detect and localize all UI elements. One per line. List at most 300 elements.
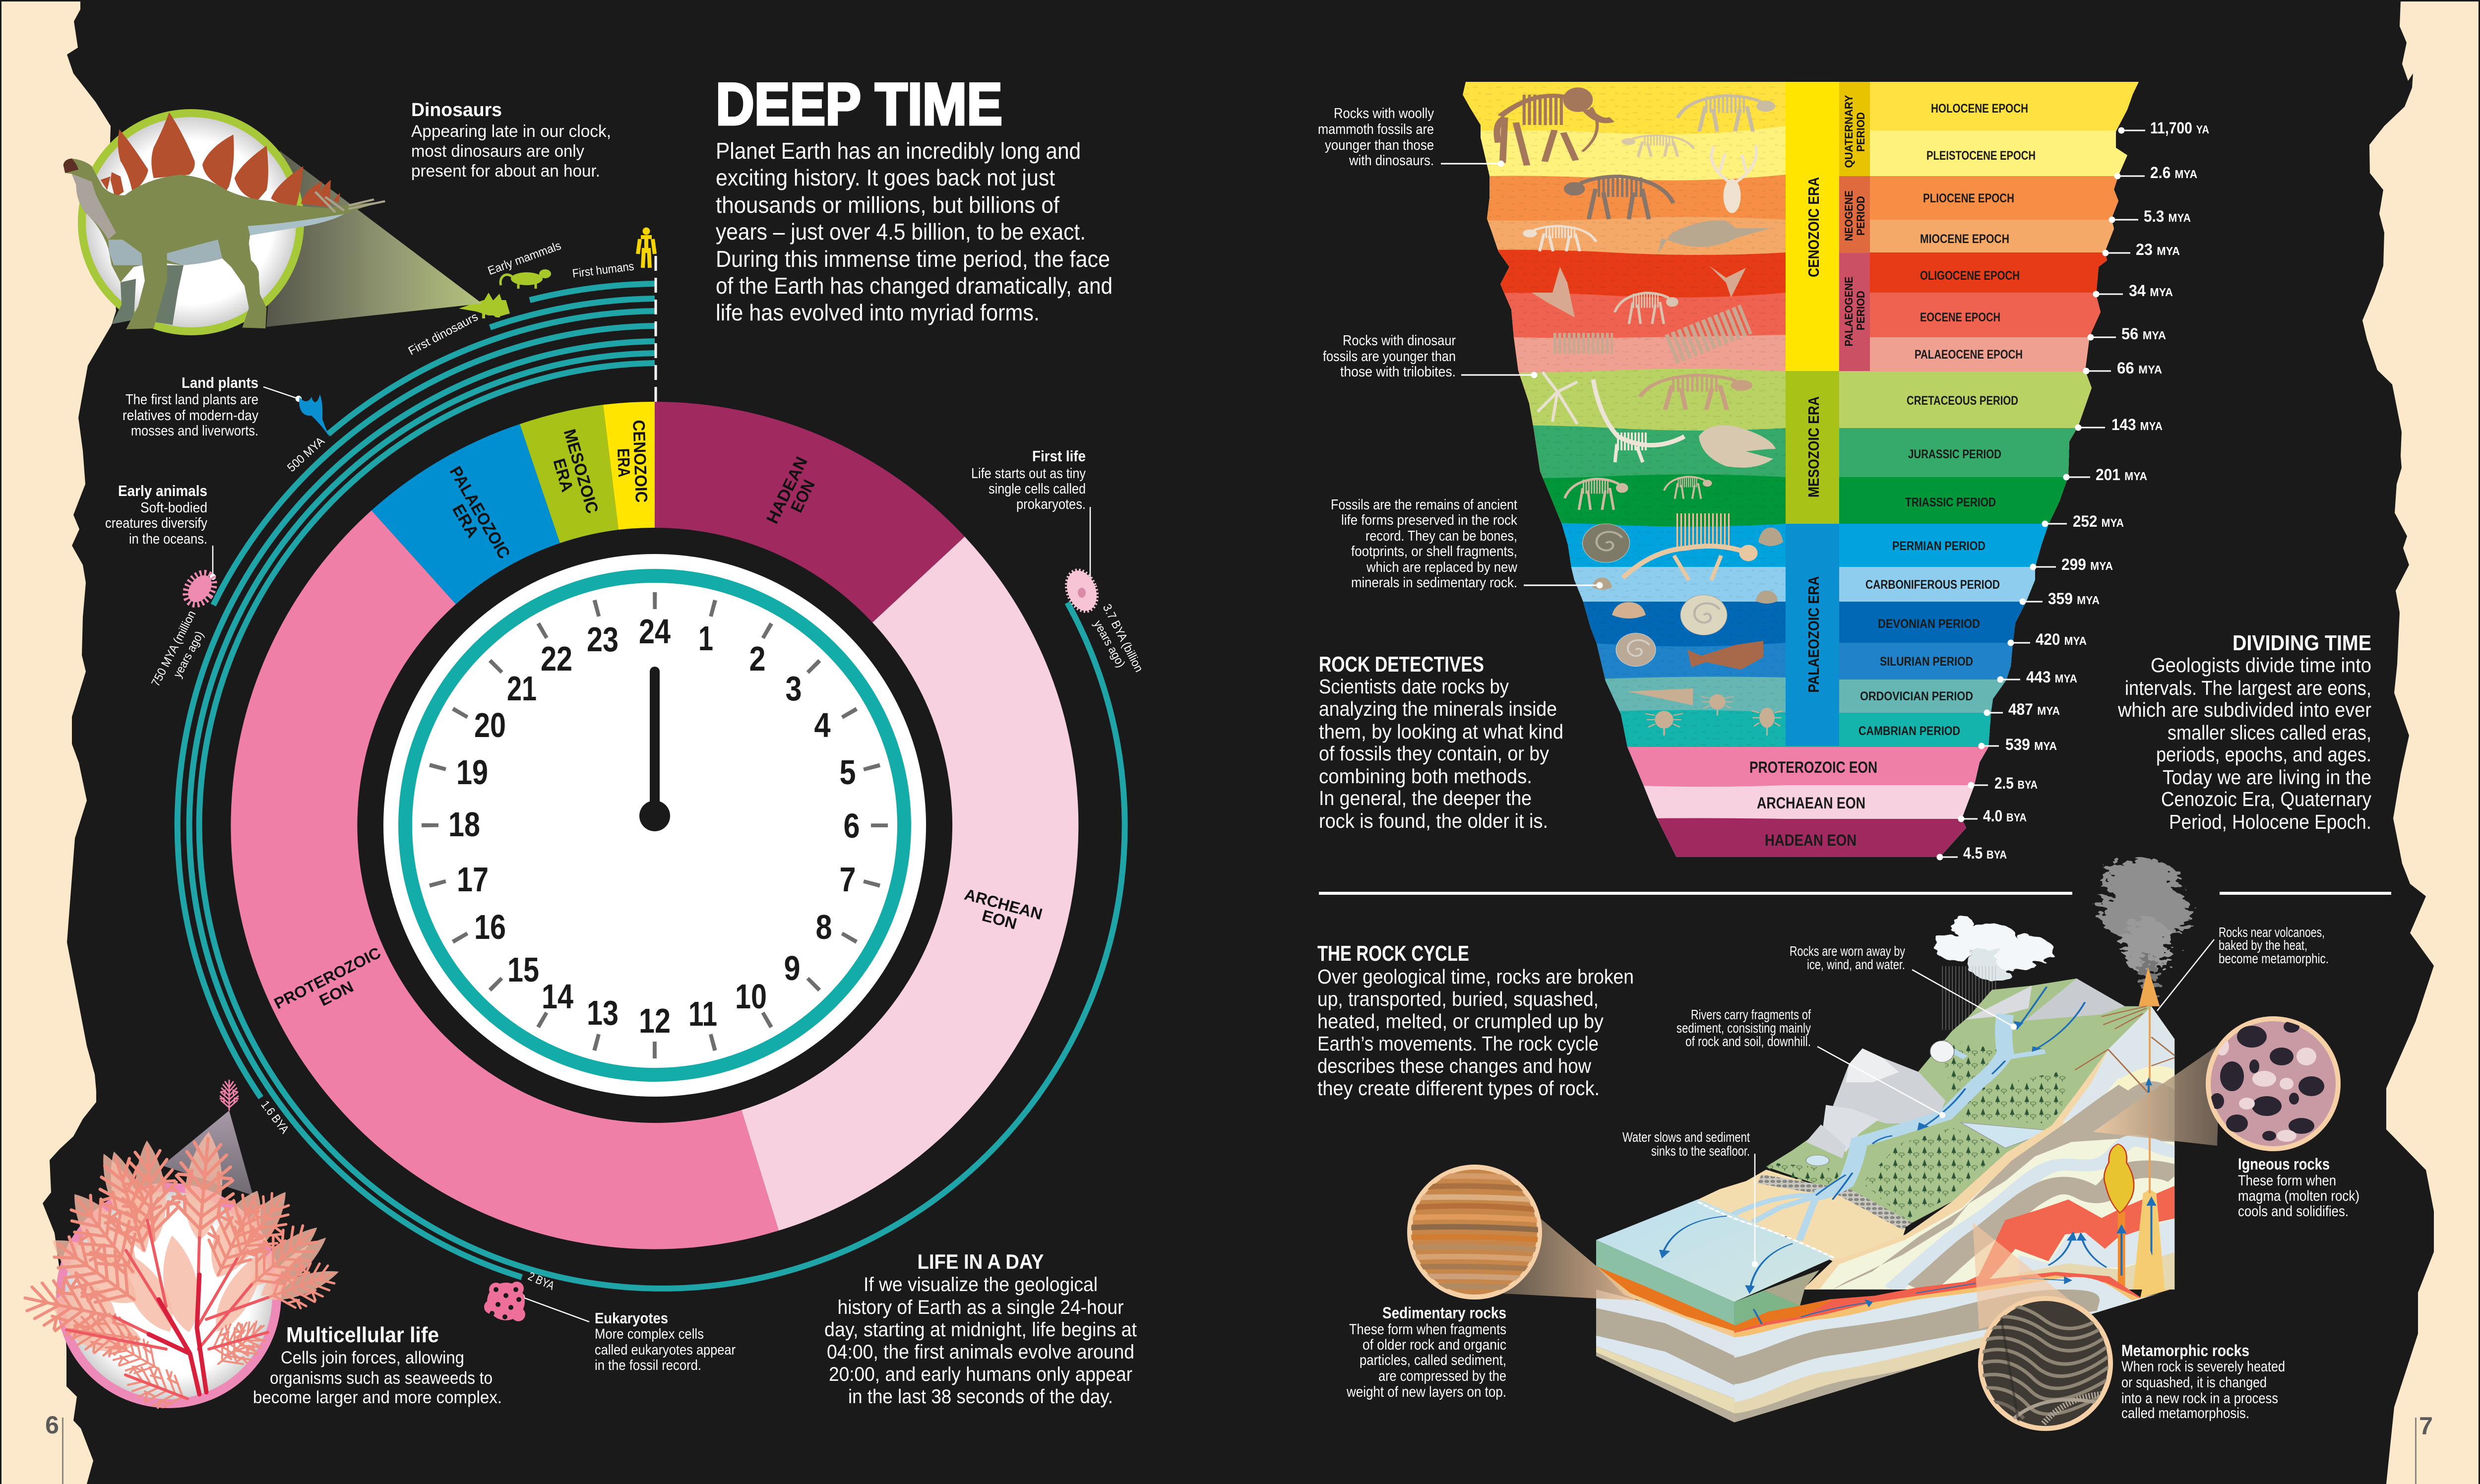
label: igneous rocks: cools and solidifies. [2238,1203,2349,1220]
date labels: 420 MYA [2036,630,2087,648]
date labels: 5.3 MYA [2144,207,2191,225]
label: sedimentary rocks: weight of new layers on top. [1346,1384,1506,1400]
label: Archean Eon: ARCHEAN [963,885,1044,923]
note leader lines [1441,161,1602,588]
text: life in a day: day, starting at midnight, life begins at [824,1319,1137,1341]
callout: eukaryotes text: called eukaryotes appear [595,1342,736,1358]
label: Mesozoic Era: ERA [549,456,577,494]
epoch and period labels: TRIASSIC PERIOD [1905,495,1996,509]
icon: small stegosaurus [459,293,510,318]
note: rivers carry fragments: Rivers carry fragments of [1691,1007,1811,1022]
text: rock detectives [1319,652,1563,832]
rain [1942,921,1998,1075]
vertical era labels: CENOZOIC ERA [1805,177,1822,277]
note: rocks are worn away: Rocks are worn away by [1790,943,1905,959]
date labels: 66 MYA [2117,359,2162,377]
callout: land plants text: Land plants [182,374,258,391]
date labels: 4.0 BYA [1983,807,2027,825]
note: fossils definition: record. They can be bones, [1365,528,1517,544]
note: woolly mammoth rocks: with dinosaurs. [1349,153,1434,169]
callout: multicellular life text [253,1323,502,1407]
river and delta [1816,1014,2005,1195]
fossil: pterodactyl skeleton [1538,372,1577,424]
note: dinosaur rocks [1323,333,1456,380]
hour numerals: 7 [839,860,856,899]
text: the rock cycle: up, transported, buried, squashed, [1317,988,1599,1010]
date labels: 252 MYA [2073,512,2124,530]
hour numerals: 24 [639,612,671,651]
beach [1698,1170,1906,1261]
hour numerals: 12 [639,1001,671,1040]
lakes [1806,1041,2052,1166]
date labels: 143 MYA [2111,416,2163,433]
text: dividing time: Cenozoic Era, Quaternary [2161,788,2371,810]
epoch and period labels: HADEAN EON [1765,831,1857,849]
callout: first life text [971,447,1086,512]
callout: early animals text: Soft-bodied [140,500,207,516]
left torn page edge [1,1,116,1484]
text: the rock cycle: they create different types of rock. [1317,1077,1600,1100]
text: dividing time: which are subdivided into ever [2117,698,2371,721]
text: dividing time: Geologists divide time into [2151,654,2371,677]
epoch and period labels: PROTEROZOIC EON [1749,758,1877,776]
text: life in a day: 04:00, the first animals evolve around [827,1341,1134,1363]
callout: early animals text: Early animals [118,482,207,499]
diagram: rock cycle block [1503,859,2221,1424]
label: sedimentary rocks [1346,1304,1506,1400]
arc time labels: 3.7 BYA (billion [1100,602,1146,675]
white dial [383,554,926,1097]
label: Archean Eon: EON [980,906,1019,933]
plume and cloud [1935,859,2191,994]
text: rock detectives: of fossils they contain, or by [1319,742,1549,765]
text: rock detectives: rock is found, the older it is. [1319,809,1548,832]
vertical period labels: PALAEOGENE [1843,277,1855,346]
date labels: 4.5 BYA [1963,844,2007,862]
period column: Neogene [1839,176,1870,253]
hour numerals: 14 [542,977,573,1016]
arc time labels: 500 MYA [285,434,327,475]
vertical period labels: PERIOD [1855,291,1867,330]
label: igneous rocks: Igneous rocks [2238,1155,2330,1173]
icon: early animal [181,568,219,610]
label: Cenozoic Era [614,420,651,503]
upper flow arrows [1816,987,2107,1267]
note: woolly mammoth rocks: mammoth fossils are [1318,122,1434,137]
land and upper block face [1698,967,2178,1292]
vertical period labels: PERIOD [1855,112,1867,152]
hour numerals: 6 [843,806,860,845]
callout: eukaryotes text: Eukaryotes [595,1309,668,1327]
sea and lower block faces [1596,1199,2175,1424]
text: the rock cycle: THE ROCK CYCLE [1317,941,1469,966]
note: rivers carry fragments [1676,1007,1811,1049]
epoch and period labels: PLEISTOCENE EPOCH [1926,149,2036,163]
intro text: thousands or millions, but billions of [716,192,1059,218]
text: rock detectives: combining both methods. [1319,765,1532,788]
hour ticks [430,601,879,1050]
page number 6 [45,1411,63,1484]
label: Cenozoic Era: ERA [614,448,633,478]
text: rock detectives: them, by looking at what kind [1319,720,1563,743]
rock sample: sedimentary [1409,1167,1543,1297]
page number 6: 6 [45,1411,59,1439]
title: DEEP TIME [716,71,1002,137]
label: Palaeozoic Era: PALAEOZOIC [446,463,514,562]
callout: land plants text: The first land plants are [125,392,258,408]
date labels: 56 MYA [2121,325,2166,343]
note: fossils definition: Fossils are the remains of ancient [1331,497,1517,513]
label: metamorphic rocks: Metamorphic rocks [2121,1342,2249,1360]
hour numerals: 10 [735,977,767,1016]
note: dinosaur rocks: those with trilobites. [1340,364,1456,380]
epoch and period labels: DEVONIAN PERIOD [1878,617,1980,631]
label: Hadean Eon: HADEAN [763,454,811,527]
forest [1763,1163,1843,1185]
callout: dinosaurs text: present for about an hour. [411,162,600,181]
era column: Palaeozoic [1786,524,1839,746]
icon: prokaryote [1061,566,1102,615]
text: life in a day: If we visualize the geological [864,1274,1098,1296]
vertical period labels: QUATERNARY [1843,95,1855,168]
text: life in a day [824,1250,1137,1408]
hour numerals: 11 [688,994,717,1033]
text: the rock cycle: Earth’s movements. The rock cycle [1317,1032,1599,1055]
dashed midnight line [655,250,657,402]
rock sample: metamorphic [1979,1298,2113,1428]
fossil: T. rex skull [1699,426,1776,468]
note: woolly mammoth rocks: Rocks with woolly [1334,106,1434,122]
label: sedimentary rocks: Sedimentary rocks [1382,1304,1506,1322]
label: igneous rocks: magma (molten rock) [2238,1188,2359,1204]
callout: eukaryotes text [595,1309,736,1373]
text: dividing time: intervals. The largest are eons, [2125,677,2371,699]
label: sedimentary rocks: of older rock and organic [1363,1337,1506,1353]
callout: multicellular life text: Multicellular life [286,1323,439,1347]
intro text: life has evolved into myriad forms. [716,300,1040,325]
text: life in a day: in the last 38 seconds of the day. [848,1386,1113,1408]
note: fossils definition: which are replaced by new [1366,559,1518,575]
label: metamorphic rocks: When rock is severely heated [2121,1359,2285,1375]
illustration: seaweed in circle [19,1111,342,1417]
note: water slows [1622,1129,1750,1159]
callout: first life text: prokaryotes. [1016,496,1086,512]
date labels: 11,700 YA [2150,119,2209,137]
date labels: 23 MYA [2136,241,2180,258]
note: rivers carry fragments: sediment, consisting mainly [1676,1020,1811,1036]
text: life in a day: LIFE IN A DAY [918,1250,1044,1273]
volcanic plume [2100,859,2191,994]
text: rock detectives: Scientists date rocks by [1319,675,1509,698]
label: Mesozoic Era: MESOZOIC [560,427,602,516]
icon: human [638,228,655,268]
date labels: 359 MYA [2048,590,2100,608]
beam: sedimentary [1503,1215,1637,1300]
note: fossils definition: footprints, or shell fragments, [1351,544,1517,559]
fossil: ichthyosaur [1658,220,1771,254]
vertical era labels [1805,177,1822,692]
epoch and period labels: SILURIAN PERIOD [1880,655,1973,669]
hour numerals: 8 [815,908,832,946]
beam: metamorphic [1973,1222,2072,1329]
teal dial ring [405,576,904,1075]
callout: dinosaurs text: Dinosaurs [411,100,502,121]
callout: dinosaurs text [411,100,611,181]
label: igneous rocks [2238,1155,2359,1220]
note: rivers carry fragments: of rock and soil, downhill. [1685,1034,1811,1049]
hour numerals [448,612,860,1040]
fossil: shells [1592,528,1783,618]
hour numerals: 17 [457,860,489,899]
timeline arcs [178,284,1125,1289]
text: dividing time: periods, epochs, and ages. [2156,743,2371,766]
sea surface [1596,1199,1834,1302]
label: Proterozoic Eon: PROTEROZOIC [271,943,383,1013]
text: dividing time: Today we are living in the [2163,766,2371,789]
right torn page edge [2362,1,2479,1484]
note: water slows: Water slows and sediment [1622,1129,1750,1145]
date labels: 443 MYA [2026,668,2077,686]
callout: eukaryotes text: in the fossil record. [595,1358,701,1373]
date labels: 487 MYA [2008,700,2060,718]
segment: Mesozoic era [520,405,619,543]
note: fossils definition: minerals in sedimentary rock. [1351,575,1517,591]
note: fossils definition [1331,497,1518,591]
note: dinosaur rocks: fossils are younger than [1323,349,1456,365]
era column: Mesozoic [1786,371,1839,524]
clock chart: eon and era ring [231,402,1078,1249]
hour numerals: 22 [541,639,572,678]
text: dividing time: DIVIDING TIME [2232,631,2371,655]
hour numerals: 3 [786,669,802,708]
callout: land plants text [123,374,258,439]
hour numerals: 9 [784,949,801,988]
text: rock detectives: analyzing the minerals inside [1319,697,1557,720]
segment: Proterozoic eon [231,510,779,1249]
segment: Hadean eon [655,402,965,622]
epoch and period labels: ORDOVICIAN PERIOD [1860,689,1973,703]
period column: Quaternary [1839,82,1870,176]
callout: dinosaurs text: Appearing late in our clock, [411,122,611,141]
note: rocks are worn away: ice, wind, and water. [1807,957,1905,972]
note: rocks near volcanoes: baked by the heat, [2219,937,2307,953]
upper rock layers [1799,1004,2178,1292]
arc time labels: 750 MYA (million [149,609,198,689]
label: sedimentary rocks: are compressed by the [1378,1368,1506,1384]
hour numerals: 20 [474,706,506,744]
fossil: dimetrodon [1623,531,1757,580]
hour numerals: 2 [749,639,766,678]
hour numerals: 15 [507,950,539,989]
callout: land plants text: mosses and liverworts. [131,423,258,439]
epoch and period labels: PERMIAN PERIOD [1892,539,1985,553]
segment: Archean eon [742,537,1078,1231]
hour numerals: 4 [814,706,831,744]
brown veins [2075,1006,2174,1093]
arc time labels: 2 BYA [526,1270,557,1293]
epoch and period labels: CRETACEOUS PERIOD [1907,394,2018,408]
arc time labels: years ago) [1091,618,1128,670]
epoch and period labels: OLIGOCENE EPOCH [1920,269,2020,283]
callout: multicellular life text: become larger and more complex. [253,1388,502,1407]
callout: multicellular life text: Cells join forces, allowing [281,1348,464,1367]
callout: dinosaurs text: most dinosaurs are only [411,142,584,161]
callout: land plants text: relatives of modern-day [123,408,258,424]
magma intrusion [2104,1144,2134,1213]
text: life in a day: 20:00, and early humans only appear [829,1363,1132,1385]
epoch and period labels: HOLOCENE EPOCH [1931,102,2028,116]
intro text [716,138,1113,325]
arc time labels: Early mammals [486,239,563,278]
intro text: exciting history. It goes back not just [716,165,1055,190]
hour numerals: 23 [587,620,619,659]
date labels: 34 MYA [2129,282,2173,300]
date labels: 539 MYA [2005,736,2057,753]
text: the rock cycle: Over geological time, rocks are broken [1317,965,1634,988]
left block face [1596,1240,1735,1422]
date labels: 201 MYA [2096,466,2147,484]
callout: early animals text [105,482,207,547]
intro text: During this immense time period, the face [716,246,1110,272]
period column: Palaeogene [1839,253,1870,371]
callout: early animals text: creatures diversify [105,515,207,531]
green land surface [1766,979,2151,1226]
vertical period labels: PERIOD [1855,196,1867,236]
label: Hadean Eon: EON [787,477,819,515]
text: rock detectives: In general, the deeper the [1319,787,1532,809]
text: dividing time: Period, Holocene Epoch. [2169,810,2371,833]
text: the rock cycle [1317,941,1634,1100]
gravel shoreline [1759,1179,1907,1226]
label: metamorphic rocks: or squashed, it is changed [2121,1374,2267,1391]
date labels: 299 MYA [2061,556,2113,573]
date labels: 2.5 BYA [1994,774,2038,792]
vertical era labels: MESOZOIC ERA [1805,396,1822,497]
volcano vent [2139,967,2160,1006]
note: fossils definition: life forms preserved in the rock [1341,512,1517,528]
vertical period labels [1843,95,1867,346]
fossils [1497,88,1783,736]
page number 7: 7 [2419,1412,2433,1440]
label: metamorphic rocks [2121,1342,2285,1422]
text: the rock cycle: heated, melted, or crumpled up by [1317,1010,1604,1033]
mountains [1806,979,2125,1158]
note: dinosaur rocks: Rocks with dinosaur [1343,333,1456,349]
hour numerals: 1 [698,619,713,658]
intro text: Planet Earth has an incredibly long and [716,138,1081,164]
label: sedimentary rocks: These form when fragments [1349,1321,1506,1338]
fossil: mammoth [1497,88,1612,166]
illustration: stegosaurus in circle [63,112,482,331]
epoch and period labels: PLIOCENE EPOCH [1923,191,2014,205]
text: life in a day: history of Earth as a single 24-hour [837,1297,1124,1318]
cloud [1935,916,2051,980]
fossil: ammonites [1582,524,1630,562]
text: dividing time [2117,631,2371,833]
epoch and period labels: CARBONIFEROUS PERIOD [1865,578,2000,592]
callout: eukaryotes text: More complex cells [595,1326,704,1342]
epoch and period labels: CAMBRIAN PERIOD [1859,724,1960,738]
text: dividing time: smaller slices called eras, [2168,721,2371,744]
diagram leader lines [1752,939,2214,1267]
note: rocks near volcanoes: Rocks near volcanoes, [2219,925,2325,940]
date labels [1963,119,2209,862]
label: Proterozoic Eon: EON [316,978,356,1009]
hour numerals: 13 [587,993,619,1032]
epoch and period labels: MIOCENE EPOCH [1920,232,2009,246]
era column: Cenozoic [1786,82,1839,371]
clock face [383,554,926,1097]
callout: multicellular life text: organisms such as seaweeds to [270,1368,493,1388]
epoch and period labels [1749,102,2036,849]
volcano conduit [2133,1189,2165,1290]
intro text: years – just over 4.5 billion, to be exact. [716,219,1086,245]
label: sedimentary rocks: particles, called sediment, [1360,1352,1506,1368]
icon: mammal [500,269,551,289]
segment: Palaeozoic era [372,424,560,604]
fossil: orthocone and trilobites [1627,688,1783,736]
note: rocks are worn away [1790,943,1905,972]
arc time labels [149,239,1146,1293]
note: rocks near volcanoes [2219,925,2329,966]
fossil: skeletons [1677,96,1775,131]
segment: Cenozoic era [603,402,655,530]
arc time labels: 1.6 BYA [258,1098,291,1136]
fossil: antlered skull [1712,145,1756,213]
icon: land plant [299,394,330,437]
hour numerals: 19 [456,753,488,792]
note: rocks near volcanoes: become metamorphic. [2219,951,2329,966]
hour numerals: 21 [507,669,537,708]
fossil: leaves [1553,319,1746,350]
note: woolly mammoth rocks [1318,106,1434,169]
text: rock detectives: ROCK DETECTIVES [1319,652,1484,677]
vertical era labels: PALAEOZOIC ERA [1805,576,1822,692]
hour numerals: 16 [474,908,506,946]
hour numerals: 18 [448,805,480,844]
label: igneous rocks: These form when [2238,1173,2336,1189]
beam: igneous [2093,1044,2221,1146]
callout: first life text: First life [1032,447,1086,465]
label: metamorphic rocks: called metamorphosis. [2121,1405,2249,1422]
date ticks [1937,128,2145,860]
hour numerals: 5 [839,753,856,792]
arc time labels: years ago) [171,629,206,680]
rock sample: igneous [2208,1019,2338,1149]
leader lines for clock callouts [210,387,1093,1322]
note: woolly mammoth rocks: younger than those [1325,137,1434,153]
label: Palaeozoic Era: ERA [448,501,482,541]
text: the rock cycle: describes these changes and how [1317,1054,1591,1077]
note: water slows: sinks to the seafloor. [1651,1143,1750,1159]
intro text: of the Earth has changed dramatically, and [716,273,1113,299]
page number 7 [2415,1412,2433,1484]
clock hand [639,667,670,831]
rock layers [1463,82,2139,857]
fossil: fish [1687,641,1763,670]
epoch and period labels: PALAEOCENE EPOCH [1915,348,2023,362]
arc time labels: First humans [571,260,635,281]
lower flow arrows [1662,1216,2066,1324]
icon: small seaweed [220,1080,238,1110]
epoch and period labels: JURASSIC PERIOD [1908,447,2001,461]
epoch and period labels: ARCHAEAN EON [1757,794,1865,812]
fossil: pterosaurs [1532,265,1746,317]
icon: eukaryotes [484,1282,525,1321]
callout: early animals text: in the oceans. [129,531,207,547]
arc time labels: First dinosaurs [406,310,480,358]
chart: geological column [1438,79,2209,863]
